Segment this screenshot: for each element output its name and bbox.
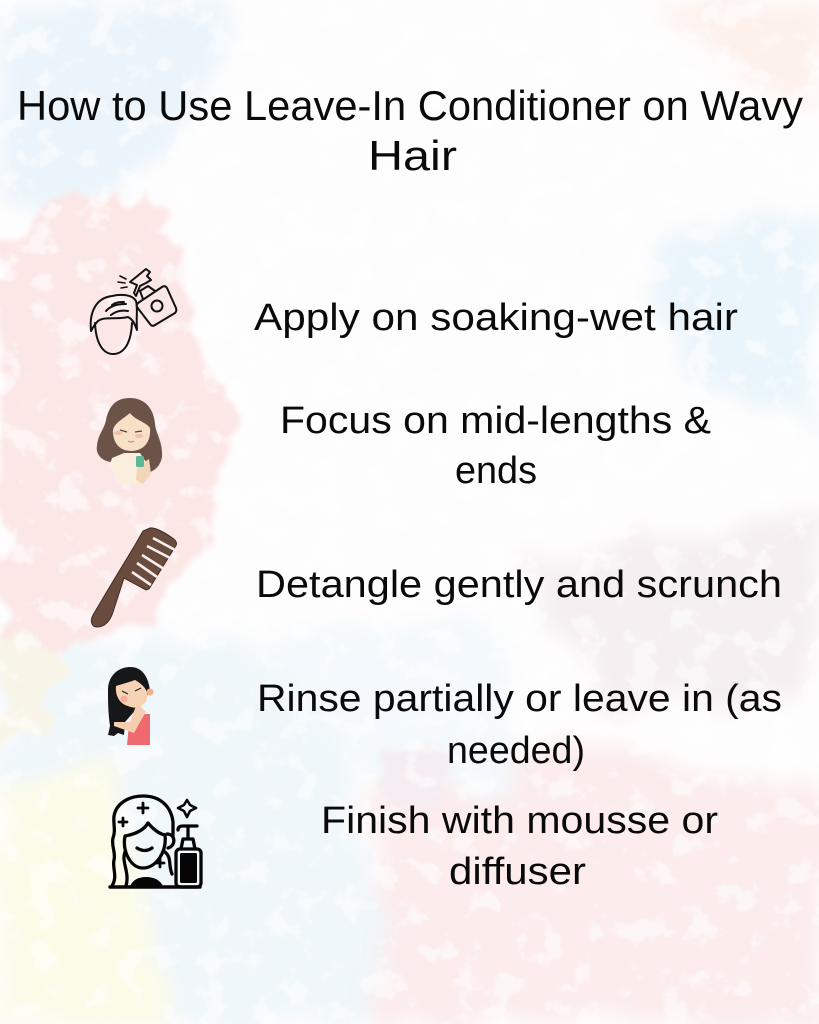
step 3: detangle gently and scrunch	[91, 528, 782, 627]
label: Rinse partially or leave in (as	[257, 678, 782, 720]
icon: woman with conditioner bottle	[110, 796, 201, 887]
step 5: finish with mousse or diffuser	[110, 796, 201, 887]
label: Finish with mousse or	[321, 800, 718, 842]
label: ends	[455, 450, 537, 492]
icon: woman applying product	[97, 398, 162, 484]
icon: hair and spray bottle	[91, 269, 176, 354]
label: Detangle gently and scrunch	[256, 564, 782, 606]
label	[280, 400, 711, 492]
title	[17, 82, 803, 179]
icon: woman with long black hair	[108, 667, 154, 745]
step 1: apply on soaking-wet hair	[91, 269, 738, 354]
step 4: rinse partially or leave in	[108, 667, 782, 772]
label: needed)	[447, 730, 585, 772]
step 2: focus on mid-lengths and ends	[97, 398, 711, 492]
label: Apply on soaking-wet hair	[254, 297, 738, 339]
label	[321, 800, 718, 893]
icon: comb	[91, 528, 176, 627]
label: diffuser	[449, 851, 586, 893]
title: Hair	[368, 132, 457, 179]
label	[257, 678, 782, 772]
title: How to Use Leave-In Conditioner on Wavy	[17, 82, 803, 129]
label: Focus on mid-lengths &	[280, 400, 711, 442]
